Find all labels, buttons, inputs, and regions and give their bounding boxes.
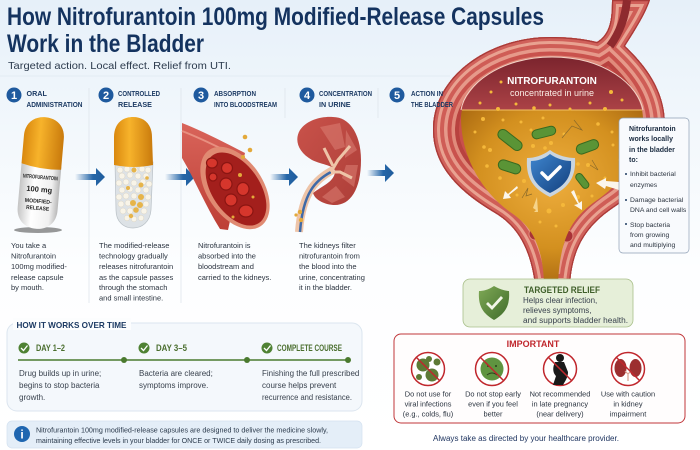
step 4 text: the blood into the xyxy=(299,262,357,271)
relief text: Helps clear infection, xyxy=(523,296,597,305)
step 1 number xyxy=(6,88,22,102)
step 1 number: 1 xyxy=(11,90,17,102)
step 3 heading: ABSORPTION xyxy=(214,89,256,98)
step 1: oral administration xyxy=(6,88,82,292)
day 3-5: DAY 3–5 xyxy=(156,343,187,353)
bullet list: and multiplying xyxy=(630,242,676,249)
step 3 text: Nitrofurantoin is xyxy=(198,241,251,250)
icon: kidney xyxy=(294,117,361,232)
white action arrows xyxy=(503,178,619,212)
warning: late pregnancy: in late pregnancy xyxy=(532,400,588,408)
step 2 heading: CONTROLLED xyxy=(118,89,160,98)
title: How Nitrofurantoin 100mg Modified-Release Capsules xyxy=(7,3,544,31)
step 1 text: 100mg modified- xyxy=(11,262,67,271)
icon: capsule with label: 100 mg xyxy=(26,184,53,195)
warning: kidney impairment xyxy=(601,352,655,418)
step 4 text xyxy=(299,241,365,292)
info text: Nitrofurantoin 100mg modified-release capsules are designed to deliver the medicine slowly, xyxy=(36,426,328,434)
step 2 number xyxy=(98,88,114,102)
day 1-2: Drug builds up in urine; xyxy=(19,369,101,378)
complete course: course helps prevent xyxy=(262,381,337,390)
bacteria xyxy=(496,125,600,190)
step 1 heading: ORAL xyxy=(26,89,47,98)
title xyxy=(7,3,544,58)
step 2 text: The modified-release xyxy=(99,241,169,250)
step 5 heading xyxy=(411,89,454,109)
step 4 heading xyxy=(319,89,372,109)
icon: capsule with label xyxy=(14,115,66,233)
panel: targeted relief xyxy=(463,279,633,327)
warning: late pregnancy: (near delivery) xyxy=(536,410,584,418)
panel: important warnings xyxy=(394,334,685,423)
step 3 number: 3 xyxy=(198,90,204,102)
warning: late pregnancy: Not recommended xyxy=(530,390,590,398)
day 3-5: Bacteria are cleared; xyxy=(139,369,213,378)
bladder label: concentrated in urine xyxy=(510,88,594,98)
step 2 heading: RELEASE xyxy=(118,100,152,109)
complete course xyxy=(262,342,359,402)
complete course: COMPLETE COURSE xyxy=(277,343,342,353)
step 3: absorption xyxy=(182,88,284,282)
warning: do not stop early: Do not stop early xyxy=(465,390,521,398)
bullet list: enzymes xyxy=(630,182,658,189)
day 1-2: DAY 1–2 xyxy=(36,343,65,353)
complete course: Finishing the full prescribed xyxy=(262,369,359,378)
step 1 text: You take a xyxy=(11,241,47,250)
step 2 text xyxy=(99,241,173,302)
step 3 heading: INTO BLOODSTREAM xyxy=(214,100,277,109)
step 2 text: through the stomach xyxy=(99,283,167,292)
relief text xyxy=(523,296,628,325)
icon: capsule with label: NITROFURANTOIN xyxy=(23,173,58,182)
warning: viral infections: (e.g., colds, flu) xyxy=(403,410,453,418)
panel heading xyxy=(628,126,676,164)
icon: green shield xyxy=(479,286,509,320)
step 3 heading xyxy=(214,89,277,109)
step 4 text: nitrofurantoin from xyxy=(299,252,360,260)
step 5 heading: THE BLADDER xyxy=(411,100,454,109)
step 4 heading: CONCENTRATION xyxy=(319,89,372,98)
step 4 number: 4 xyxy=(304,90,311,102)
bullet list xyxy=(625,171,687,249)
bullet list: from growing xyxy=(630,232,670,239)
complete course: recurrence and resistance. xyxy=(262,393,352,402)
info text: maintaining effective levels in your bladder for ONCE or TWICE daily dosing as prescribed. xyxy=(36,436,321,445)
warnings heading: IMPORTANT xyxy=(507,339,560,349)
step 5 heading: ACTION IN xyxy=(411,89,443,98)
day 1-2 xyxy=(18,342,101,402)
panel: local action xyxy=(619,118,689,253)
bullet list: DNA and cell walls xyxy=(630,207,687,214)
step 4 heading: IN URINE xyxy=(319,100,351,109)
title: Work in the Bladder xyxy=(7,30,204,58)
warning: kidney impairment: in kidney xyxy=(613,400,643,408)
timeline xyxy=(18,357,351,363)
step 3 text xyxy=(198,241,271,282)
arrow 1 xyxy=(75,168,105,186)
drug particles xyxy=(474,80,624,228)
panel heading: to: xyxy=(629,157,638,164)
step 4 text: it in the bladder. xyxy=(299,283,352,292)
subtitle: Targeted action. Local effect. Relief from UTI. xyxy=(8,60,231,72)
relief text: relieves symptoms, xyxy=(523,306,591,315)
relief text: and supports bladder health. xyxy=(523,316,628,325)
step 2 text: technology gradually xyxy=(99,252,168,260)
arrow 4 xyxy=(367,164,394,182)
warning: do not stop early xyxy=(465,352,521,418)
panel: how it works over time xyxy=(7,318,362,411)
warning: do not stop early: even if you feel xyxy=(468,400,518,408)
step 2 text: and small intestine. xyxy=(99,294,163,302)
shield xyxy=(527,150,575,197)
day 3-5 xyxy=(138,342,213,390)
warning: kidney impairment: impairment xyxy=(610,410,646,418)
day 1-2: begins to stop bacteria xyxy=(19,381,100,390)
step 1 text xyxy=(11,241,67,292)
step 4 text: The kidneys filter xyxy=(299,241,356,250)
day 3-5: symptoms improve. xyxy=(139,381,208,390)
bladder label xyxy=(507,76,597,98)
step 1 text: by mouth. xyxy=(11,283,44,292)
warning: viral infections xyxy=(403,352,453,418)
bullet list: Inhibit bacterial xyxy=(630,171,676,178)
step 1 heading: ADMINISTRATION xyxy=(26,100,82,109)
warning: viral infections: viral infections xyxy=(405,400,452,408)
step 1 text: release capsule xyxy=(11,273,64,282)
icon: info xyxy=(14,426,30,442)
warning: do not stop early: better xyxy=(484,410,503,418)
step 2: controlled release xyxy=(98,88,173,302)
step 2 heading xyxy=(118,89,160,109)
step 4 number xyxy=(300,88,314,102)
panel heading: HOW IT WORKS OVER TIME xyxy=(16,320,127,330)
icon: capsule with label: RELEASE xyxy=(26,205,50,213)
step 1 text: Nitrofurantoin xyxy=(11,252,56,260)
step 2 text: releases nitrofurantoin xyxy=(99,262,173,271)
step 2 text: as the capsule passes xyxy=(99,273,173,282)
step 3 text: absorbed into the xyxy=(198,252,256,260)
footer note: Always take as directed by your healthcare provider. xyxy=(433,434,619,443)
bladder illustration xyxy=(425,0,670,285)
relief heading: TARGETED RELIEF xyxy=(524,285,600,296)
info text xyxy=(36,426,328,445)
bacterial fragments xyxy=(522,120,598,198)
icon: info: i xyxy=(20,428,24,442)
warning: late pregnancy xyxy=(530,352,590,418)
panel heading: Nitrofurantoin xyxy=(629,126,676,133)
step 4 text: urine, concentrating xyxy=(299,273,365,282)
info note xyxy=(7,421,362,448)
step 5: action in the bladder xyxy=(390,88,454,109)
step 3 text: bloodstream and xyxy=(198,262,254,271)
icon: open capsule with beads xyxy=(114,117,153,228)
step 2 number: 2 xyxy=(103,90,109,102)
step 4: concentration in urine xyxy=(294,88,372,292)
bullet list: Damage bacterial xyxy=(630,197,684,204)
bullet list: Stop bacteria xyxy=(630,222,670,229)
arrow 3 xyxy=(270,168,298,186)
bladder label: NITROFURANTOIN xyxy=(507,76,597,87)
warning: viral infections: Do not use for xyxy=(405,390,452,398)
day 1-2: growth. xyxy=(19,393,45,402)
step 3 number xyxy=(194,88,208,102)
step 1 heading xyxy=(26,89,82,109)
step 5 number: 5 xyxy=(394,90,400,102)
icon: capsule with label: MODIFIED- xyxy=(25,198,52,206)
panel heading: in the bladder xyxy=(629,147,675,154)
warning: kidney impairment: Use with caution xyxy=(601,390,655,398)
arrow 2 xyxy=(165,168,195,186)
step 3 text: carried to the kidneys. xyxy=(198,273,271,282)
panel heading: works locally xyxy=(628,136,673,143)
icon: blood vessel xyxy=(182,123,284,242)
